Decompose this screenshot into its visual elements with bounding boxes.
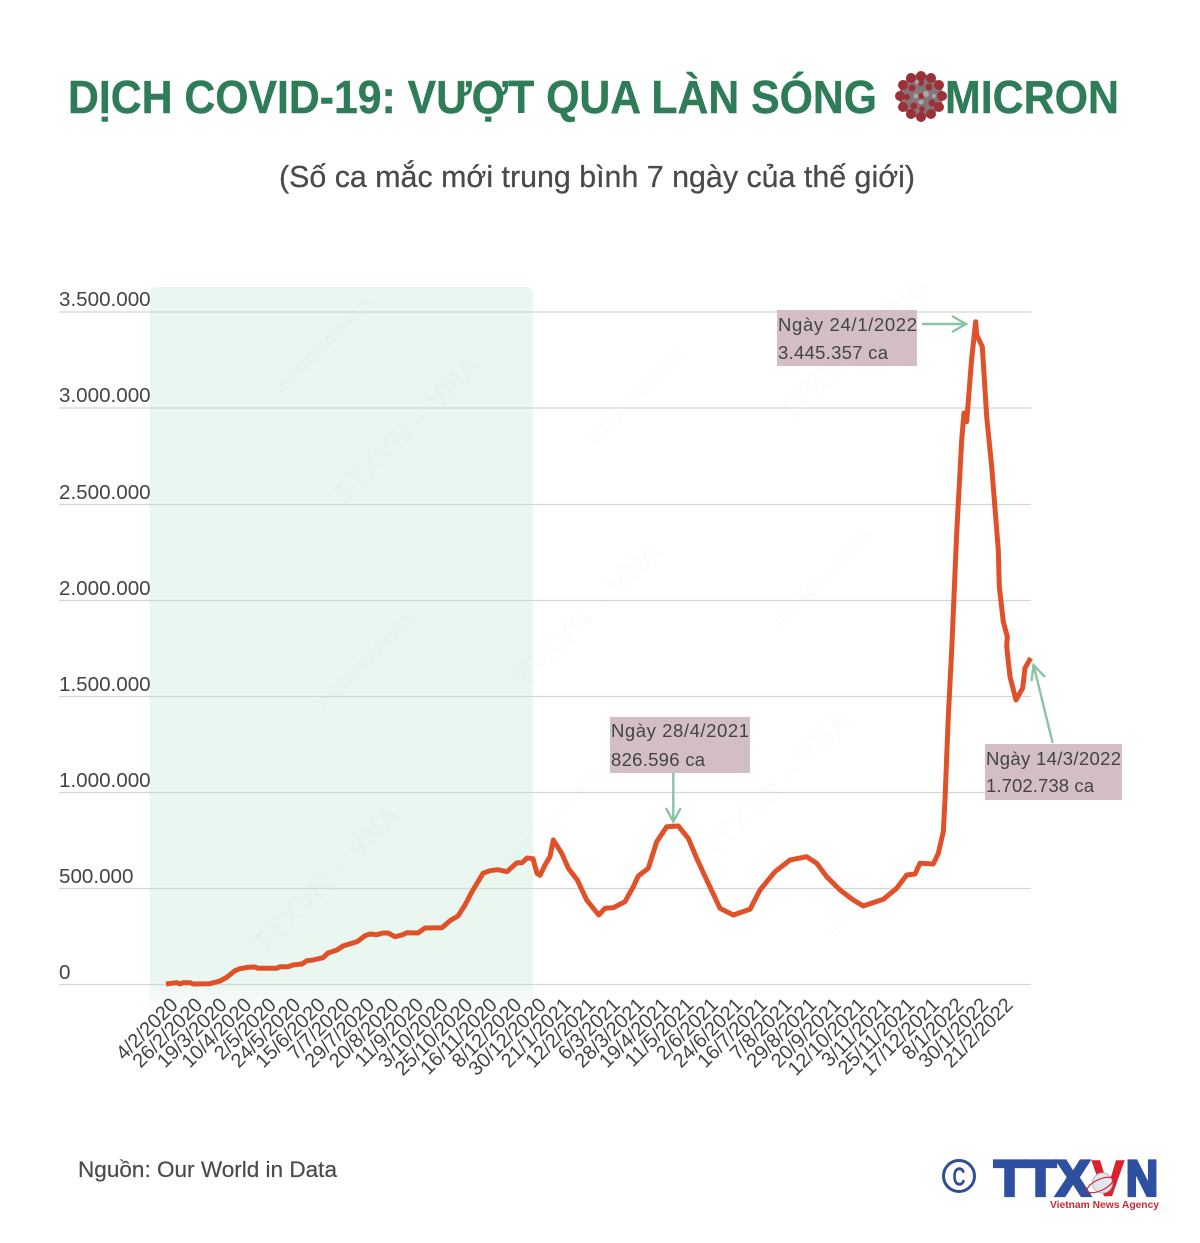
y axis labels: 2.500.000 xyxy=(59,481,151,504)
y axis labels: 0 xyxy=(59,961,70,984)
title: DỊCH COVID-19: VƯỢT QUA LÀN SÓNG xyxy=(68,71,877,123)
logo: TTXVN xyxy=(994,1150,1159,1211)
logo: TTXVN: N xyxy=(1126,1150,1158,1206)
y axis labels: 3.000.000 xyxy=(59,384,151,407)
x axis date labels: 2/6/2021 xyxy=(652,994,723,1065)
watermarks: TTXVN – VNA xyxy=(507,534,668,695)
x axis date labels: 24/5/2020 xyxy=(227,994,305,1072)
y axis labels: 1.500.000 xyxy=(59,673,151,696)
y axis labels: 3.500.000 xyxy=(59,288,151,311)
x axis date labels: 10/4/2020 xyxy=(178,994,256,1072)
x axis date labels: 12/10/2021 xyxy=(784,994,870,1080)
x axis date labels: 19/3/2020 xyxy=(153,994,232,1072)
x axis date labels: 20/9/2021 xyxy=(767,994,846,1072)
y axis labels: 2.000.000 xyxy=(59,577,151,600)
x axis date labels: 21/1/2021 xyxy=(497,994,576,1072)
x axis date labels: 12/2/2021 xyxy=(522,994,600,1072)
x axis date labels: 28/3/2021 xyxy=(571,994,649,1072)
logo: TTXVN: Vietnam News Agency xyxy=(1050,1200,1159,1211)
x axis date labels: 25/10/2020 xyxy=(391,994,477,1080)
watermarks: INFOGRAPHICS xyxy=(499,767,605,873)
callout: peak 24/1/2022 xyxy=(777,310,917,366)
x axis date labels: 19/4/2021 xyxy=(595,994,674,1072)
x axis date labels: 29/7/2020 xyxy=(301,994,379,1072)
x axis date labels: 26/2/2020 xyxy=(129,994,207,1072)
x axis date labels: 3/10/2020 xyxy=(374,994,453,1072)
callout: peak 24/1/2022: 3.445.357 ca xyxy=(778,342,889,363)
x axis date labels: 30/1/2022 xyxy=(915,994,993,1072)
source note: Nguồn: Our World in Data xyxy=(78,1157,338,1182)
watermarks: TTXVN – VNA xyxy=(697,704,858,865)
watermarks: INFOGRAPHICS xyxy=(314,607,420,713)
arrow: to January 2022 peak xyxy=(922,316,966,332)
subtitle: (Số ca mắc mới trung bình 7 ngày của thế giới) xyxy=(279,159,915,194)
x axis date labels xyxy=(112,994,1018,1080)
y axis labels: 500.000 xyxy=(59,865,133,888)
callout: 14/3/2022 xyxy=(985,744,1122,800)
x axis date labels: 7/8/2021 xyxy=(726,994,797,1065)
icon: copyright xyxy=(944,1160,974,1192)
x axis date labels: 20/8/2020 xyxy=(325,994,404,1072)
x axis date labels: 8/1/2022 xyxy=(898,994,968,1065)
watermarks: TTXVN – VNA xyxy=(247,799,408,960)
watermarks: INFOGRAPHICS xyxy=(271,292,377,398)
x axis date labels: 4/2/2020 xyxy=(112,994,183,1065)
x axis date labels: 2/5/2020 xyxy=(210,994,281,1065)
x axis date labels: 21/2/2022 xyxy=(939,994,1018,1072)
line chart: 7-day average cases xyxy=(166,322,1031,984)
callout: peak 24/1/2022: Ngày 24/1/2022 xyxy=(778,314,917,335)
x axis date labels: 30/12/2020 xyxy=(465,994,551,1080)
x axis date labels: 16/11/2020 xyxy=(417,994,502,1079)
panel: highlighted 2020 period xyxy=(150,287,533,1012)
watermarks: INFOGRAPHICS xyxy=(824,835,930,941)
x axis date labels: 24/6/2021 xyxy=(669,994,747,1072)
title: MICRON xyxy=(945,71,1119,123)
x axis date labels: 8/12/2020 xyxy=(448,994,526,1072)
x axis date labels: 11/5/2021 xyxy=(621,994,698,1071)
logo: TTXVN: V xyxy=(1092,1150,1125,1206)
watermarks: INFOGRAPHICS xyxy=(584,344,690,450)
x axis date labels: 17/12/2021 xyxy=(858,994,944,1080)
x axis date labels: 3/11/2021 xyxy=(817,994,895,1071)
x axis date labels: 15/6/2020 xyxy=(251,994,330,1072)
arrow: to March 2022 value xyxy=(1032,665,1053,743)
callout: 28/4/2021: Ngày 28/4/2021 xyxy=(611,720,749,741)
callout: 28/4/2021: 826.596 ca xyxy=(611,749,706,770)
logo: TTXVN: TTX xyxy=(994,1150,1090,1206)
watermarks: TTXVN – VNA xyxy=(327,349,488,510)
grid lines xyxy=(59,312,1031,984)
callout: 14/3/2022: Ngày 14/3/2022 xyxy=(986,748,1121,769)
arrow: to April 2021 peak xyxy=(666,773,681,822)
x axis date labels: 16/7/2021 xyxy=(693,994,772,1072)
x axis date labels: 25/11/2021 xyxy=(834,994,919,1079)
icon: copyright: C xyxy=(952,1162,966,1192)
watermarks xyxy=(247,269,933,960)
x axis date labels: 7/7/2020 xyxy=(284,994,354,1065)
watermarks: TTXVN – VNA xyxy=(772,269,933,430)
x axis date labels: 29/8/2021 xyxy=(743,994,821,1072)
watermarks: INFOGRAPHICS xyxy=(771,525,877,631)
x axis date labels: 6/3/2021 xyxy=(554,994,625,1065)
callout: 14/3/2022: 1.702.738 ca xyxy=(986,775,1095,796)
x axis date labels: 11/9/2020 xyxy=(351,994,428,1071)
y axis labels: 1.000.000 xyxy=(59,769,151,792)
callout: 28/4/2021 xyxy=(610,717,750,773)
y axis labels xyxy=(59,288,151,984)
icon: coronavirus as letter O xyxy=(895,71,947,122)
